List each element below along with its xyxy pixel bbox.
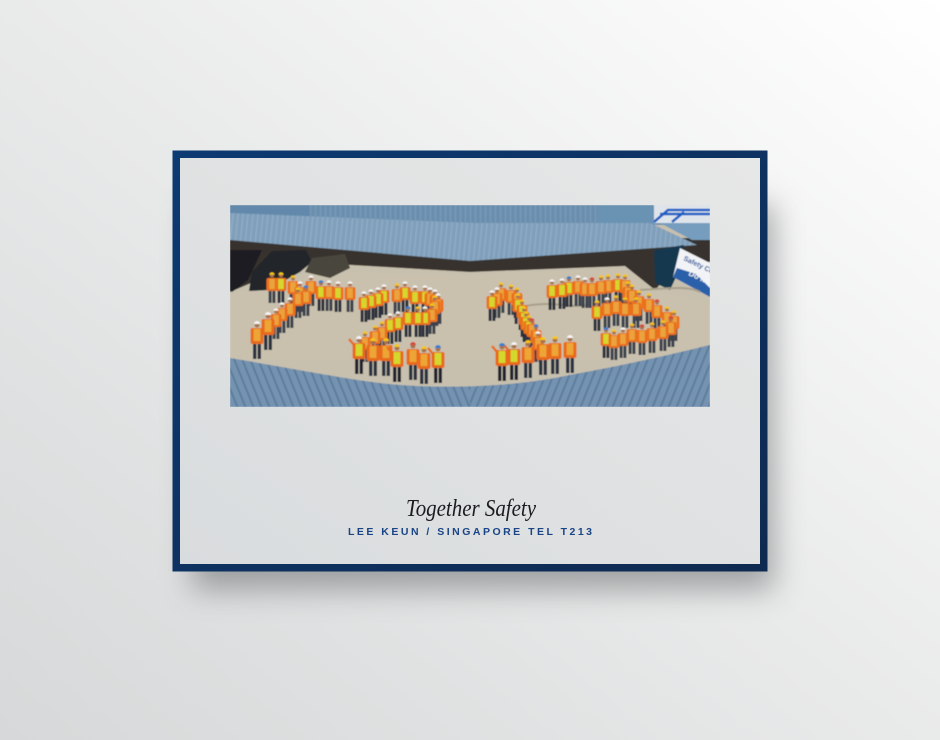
photo: workers forming letters [230, 205, 715, 407]
workers group 2 [349, 281, 444, 384]
photo banner [673, 248, 715, 297]
photo dark canopy shade [230, 238, 710, 292]
photo ground shadows [525, 288, 700, 306]
framed card [172, 150, 768, 572]
photo parked cars [230, 250, 350, 292]
photo banner: Safety Cu [682, 255, 714, 275]
photo main roof [230, 213, 697, 261]
card shadow [192, 205, 774, 590]
photo banner: Do It R [687, 269, 715, 288]
photo side roof [660, 223, 710, 240]
photo blue wall [654, 245, 684, 290]
workers group 1 [250, 272, 356, 359]
photo back wall [230, 205, 710, 225]
subtitle: LEE KEUN / SINGAPORE TEL T213 [348, 526, 592, 538]
workers group 3 [486, 282, 576, 381]
workers group 4 [546, 273, 680, 360]
photo ground [230, 268, 710, 360]
title: Together Safety [406, 496, 536, 522]
photo foreground roof [230, 345, 710, 407]
